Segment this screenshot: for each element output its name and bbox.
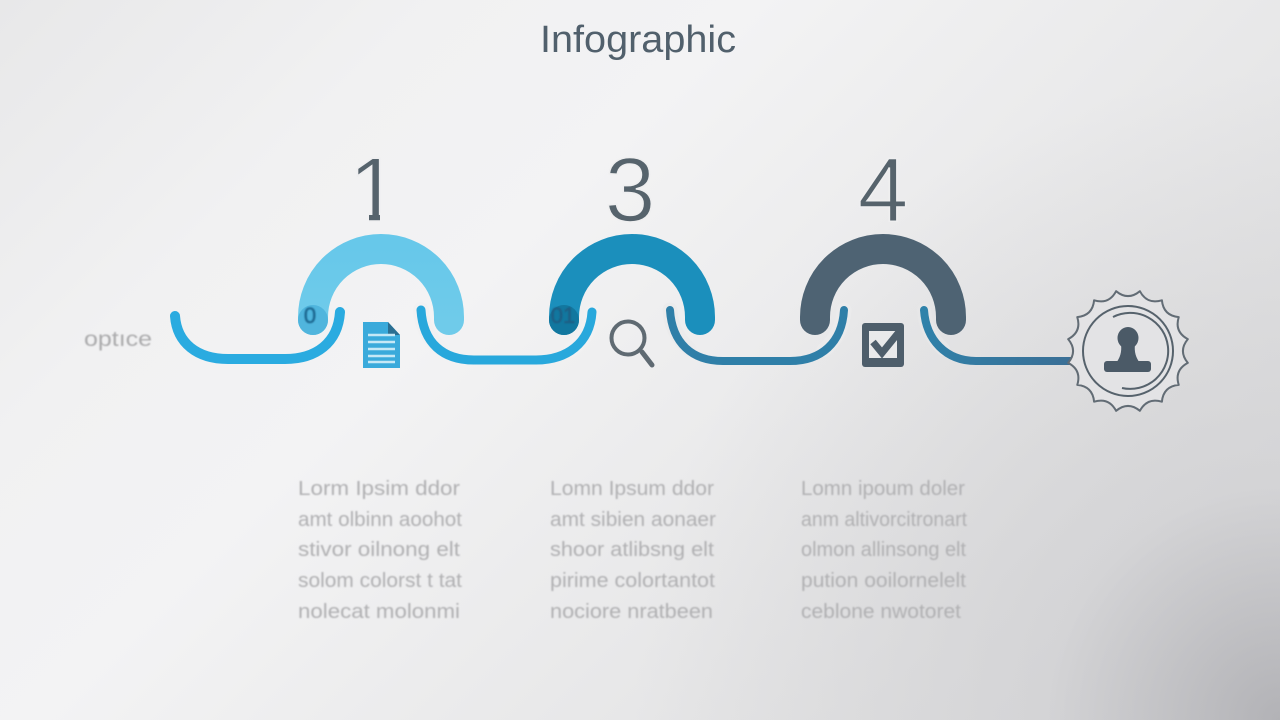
text block 1: stivor oilnong elt <box>298 539 460 561</box>
text block 2: amt sibien aonaer <box>550 509 716 531</box>
text block 1: solom colorst t tat <box>298 570 462 592</box>
icon: person <box>1104 327 1151 372</box>
text block 1: amt olbinn aoohot <box>298 509 462 531</box>
step 1 group <box>175 140 449 368</box>
text block 2: shoor atlibsng elt <box>550 539 714 561</box>
text block 3: anm altivorcitronart <box>801 509 967 531</box>
step number 3: 3 <box>605 140 655 241</box>
text block 3: olmon allinsong elt <box>801 539 966 561</box>
step number 1: 1 <box>349 140 399 241</box>
connector line 2 <box>421 310 592 360</box>
step 3 group <box>421 140 700 365</box>
arch 2 small label <box>549 303 579 335</box>
connector line 3 <box>670 310 844 361</box>
text block 1: Lorm Ipsim ddor <box>298 478 460 500</box>
arch 2 <box>564 249 700 320</box>
step number 4: 4 <box>858 140 908 241</box>
arch 2 small label: 01 <box>551 303 575 328</box>
side label: optıce <box>84 328 152 351</box>
icon: magnifier <box>612 322 652 365</box>
text block 3: pution ooilornelelt <box>801 570 966 592</box>
arch 1 small label <box>298 303 328 335</box>
text block 3 <box>801 478 967 623</box>
title: Infographic <box>540 19 736 61</box>
step 4 group <box>670 140 951 367</box>
arch 3 <box>815 249 951 320</box>
text block 2 <box>550 478 716 623</box>
text block 2: nociore nratbeen <box>550 601 713 623</box>
arch 1 <box>313 249 449 320</box>
connector line 1 <box>175 312 340 359</box>
text block 3: ceblone nwotoret <box>801 601 961 623</box>
text block 2: pirime colortantot <box>550 570 715 592</box>
text block 1 <box>298 478 462 623</box>
icon: document <box>363 322 400 368</box>
text block 3: Lomn ipoum doler <box>801 478 965 500</box>
connector line to badge <box>924 310 1072 361</box>
text block 2: Lomn Ipsum ddor <box>550 478 714 500</box>
text block 1: nolecat molonmi <box>298 601 460 623</box>
badge: seal with person <box>1068 291 1188 411</box>
icon: checkbox <box>862 323 904 367</box>
arch 1 small label: 0 <box>304 303 316 328</box>
